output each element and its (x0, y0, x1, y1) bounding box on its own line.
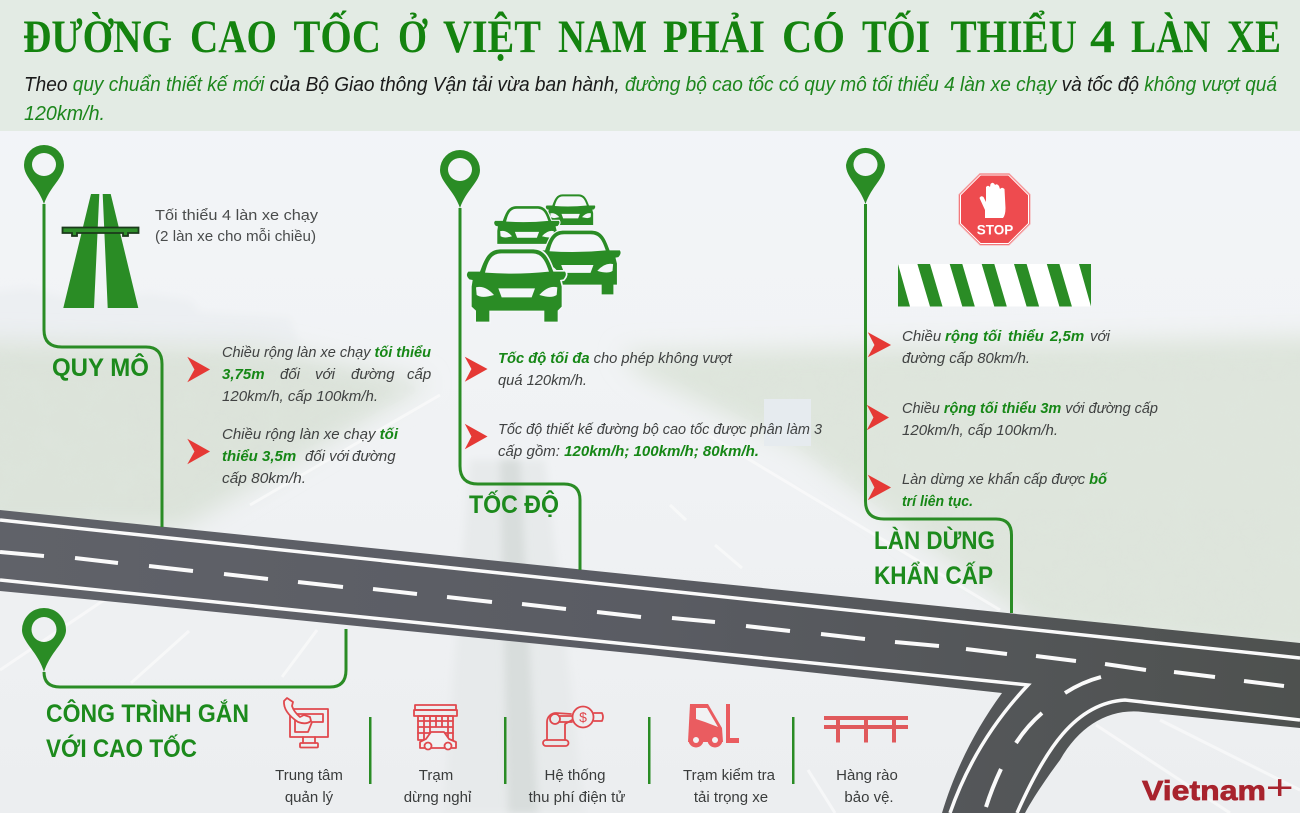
title: XE (1227, 11, 1281, 63)
text: shoulder 3m: Chiều rộng tối thiểu 3m với đường cấp (902, 400, 1158, 417)
highway graphic (0, 510, 1300, 813)
title: PHẢI (663, 11, 765, 63)
icon: fence (824, 716, 908, 742)
text: shoulder 2.5m: rộng (945, 328, 978, 345)
chevron (869, 476, 890, 499)
title: VIỆT (443, 11, 541, 63)
icon: cars (467, 194, 621, 322)
text: lane width 3.5: cấp 80km/h. (222, 470, 306, 487)
logo: Vietnam+: Vietnam (1142, 775, 1266, 806)
text: four lanes (155, 208, 319, 245)
connector line: công trình (44, 629, 346, 687)
chevron (466, 358, 486, 380)
text: lane width 3.5: đối với (305, 448, 350, 465)
chevron (189, 358, 209, 381)
chevron (189, 440, 209, 463)
text: shoulder 2.5m: tối (983, 328, 1002, 345)
text: shoulder 2.5m: với (1090, 328, 1111, 345)
icon: location pin (24, 145, 64, 204)
intro text: 120km/h. (24, 103, 105, 125)
background: hazy highway photo (0, 332, 1300, 813)
label: weigh station: Trạm kiểm tra (683, 767, 776, 784)
label: fence (836, 767, 898, 806)
text: lane width 3.5: thiểu 3,5m (222, 448, 296, 465)
label: fence: bảo vệ. (844, 789, 894, 806)
text: lane width 3.75: đối (280, 366, 301, 383)
text: continuous lane (902, 471, 1108, 510)
divider (504, 717, 506, 784)
logo: Vietnam+ (1142, 769, 1293, 807)
heading: làn dừng khẩn cấp: KHẨN CẤP (874, 561, 993, 590)
label: control centre: Trung tâm (275, 767, 343, 784)
label: electronic toll: Hệ thống (545, 767, 605, 784)
title: NAM (558, 11, 647, 63)
text: shoulder 2.5m: đường cấp 80km/h. (902, 350, 1030, 367)
intro text: Theo quy chuẩn thiết kế mới của Bộ Giao thông Vận tải vừa ban hành, đường bộ cao tốc có quy mô tối thiểu 4 làn xe chạy và tốc độ không vượt quá (24, 74, 1277, 96)
text: shoulder 2.5m: 2,5m (1049, 328, 1084, 345)
title: LÀN (1131, 11, 1211, 63)
text: design speed: Tốc độ thiết kế đường bộ cao tốc được phân làm 3 (498, 421, 823, 438)
icon: electronic toll: $ (579, 709, 587, 725)
label: rest stop: Trạm (419, 767, 453, 784)
title (23, 10, 1281, 63)
text: continuous lane: Làn dừng xe khẩn cấp được bố (902, 471, 1108, 488)
icon: stop sign (959, 174, 1030, 245)
label: rest stop: dừng nghỉ (404, 789, 472, 806)
title: CÓ (782, 11, 845, 63)
label: control centre: quản lý (285, 789, 334, 806)
label: weigh station (683, 767, 776, 806)
chevron (868, 406, 888, 429)
label: electronic toll (529, 767, 625, 806)
icon: weigh station (688, 704, 739, 748)
logo: Vietnam+: + (1265, 769, 1293, 807)
intro text (24, 74, 1277, 125)
icon: electronic toll (543, 706, 603, 746)
connector line: quy mô (44, 204, 162, 527)
title: THIỂU (950, 10, 1077, 63)
panel: làn dừng khẩn cấp (846, 148, 1158, 613)
text: lane width 3.75: cấp (407, 366, 431, 383)
text: lane width 3.5: Chiều rộng làn xe chạy tối (222, 426, 399, 443)
title: TỐI (862, 10, 930, 63)
text: continuous lane: trí liên tục. (902, 493, 973, 510)
text: lane width 3.75: đường (351, 366, 395, 383)
text: lane width 3.75: Chiều rộng làn xe chạy tối thiểu (222, 344, 431, 361)
panel: công trình gắn với cao tốc (22, 608, 908, 806)
text: max speed (498, 350, 733, 389)
title: TỐC (294, 10, 381, 63)
chevron (869, 334, 890, 356)
text: shoulder 2.5m (902, 328, 1111, 367)
heading: công trình (46, 698, 249, 763)
text: max speed: Tốc độ tối đa cho phép không vượt (498, 350, 733, 367)
text: lane width 3.5: đường (352, 448, 396, 465)
title: CAO (190, 11, 277, 63)
heading: công trình: CÔNG TRÌNH GẮN (46, 698, 249, 728)
text: shoulder 3m (902, 400, 1158, 439)
label: weigh station: tải trọng xe (694, 789, 768, 806)
title: ĐƯỜNG (23, 11, 172, 63)
text: lane width 3.75 (222, 344, 431, 405)
panel: tốc độ (440, 150, 823, 570)
icon: location pin (846, 148, 885, 204)
heading: tốc độ: TỐC ĐỘ (469, 489, 559, 519)
text: max speed: quá 120km/h. (498, 372, 587, 389)
icon: location pin (440, 150, 480, 208)
icon: location pin (22, 608, 66, 672)
icon: stop sign: STOP (977, 222, 1013, 238)
heading: công trình: VỚI CAO TỐC (46, 733, 197, 763)
text: lane width 3.75: 3,75m (222, 366, 265, 383)
divider (648, 717, 650, 784)
connector line: làn dừng (866, 204, 1012, 613)
text: lane width 3.5 (222, 426, 399, 487)
divider (369, 717, 372, 784)
title: 4 (1090, 11, 1115, 63)
text: design speed: cấp gồm: 120km/h; 100km/h; 80km/h. (498, 443, 759, 460)
label: electronic toll: thu phí điện tử (529, 789, 625, 806)
header band (0, 0, 1300, 131)
text: shoulder 3m: 120km/h, cấp 100km/h. (902, 422, 1058, 439)
icon: striped barrier (898, 264, 1091, 306)
text: four lanes: (2 làn xe cho mỗi chiều) (155, 228, 316, 245)
heading: làn dừng khẩn cấp (874, 525, 995, 590)
heading: làn dừng khẩn cấp: LÀN DỪNG (874, 525, 995, 555)
label: fence: Hàng rào (836, 767, 898, 784)
panel: quy mô (24, 145, 431, 527)
divider (792, 717, 794, 784)
text: shoulder 2.5m: thiểu (1008, 328, 1044, 345)
label: control centre (275, 767, 343, 806)
heading: quy mô: QUY MÔ (52, 352, 149, 382)
text: lane width 3.75: với (315, 366, 336, 383)
icon: highway (62, 194, 138, 308)
text: design speed (498, 421, 823, 460)
chevron (466, 425, 486, 448)
text: lane width 3.75: 120km/h, cấp 100km/h. (222, 388, 378, 405)
label: rest stop (404, 767, 472, 806)
title: Ở (398, 11, 428, 63)
text: four lanes: Tối thiểu 4 làn xe chạy (155, 208, 319, 224)
text: shoulder 2.5m: Chiều (902, 328, 942, 345)
icon: control centre (284, 698, 328, 748)
connector line: tốc độ (460, 208, 580, 570)
icon: rest stop (414, 705, 457, 750)
